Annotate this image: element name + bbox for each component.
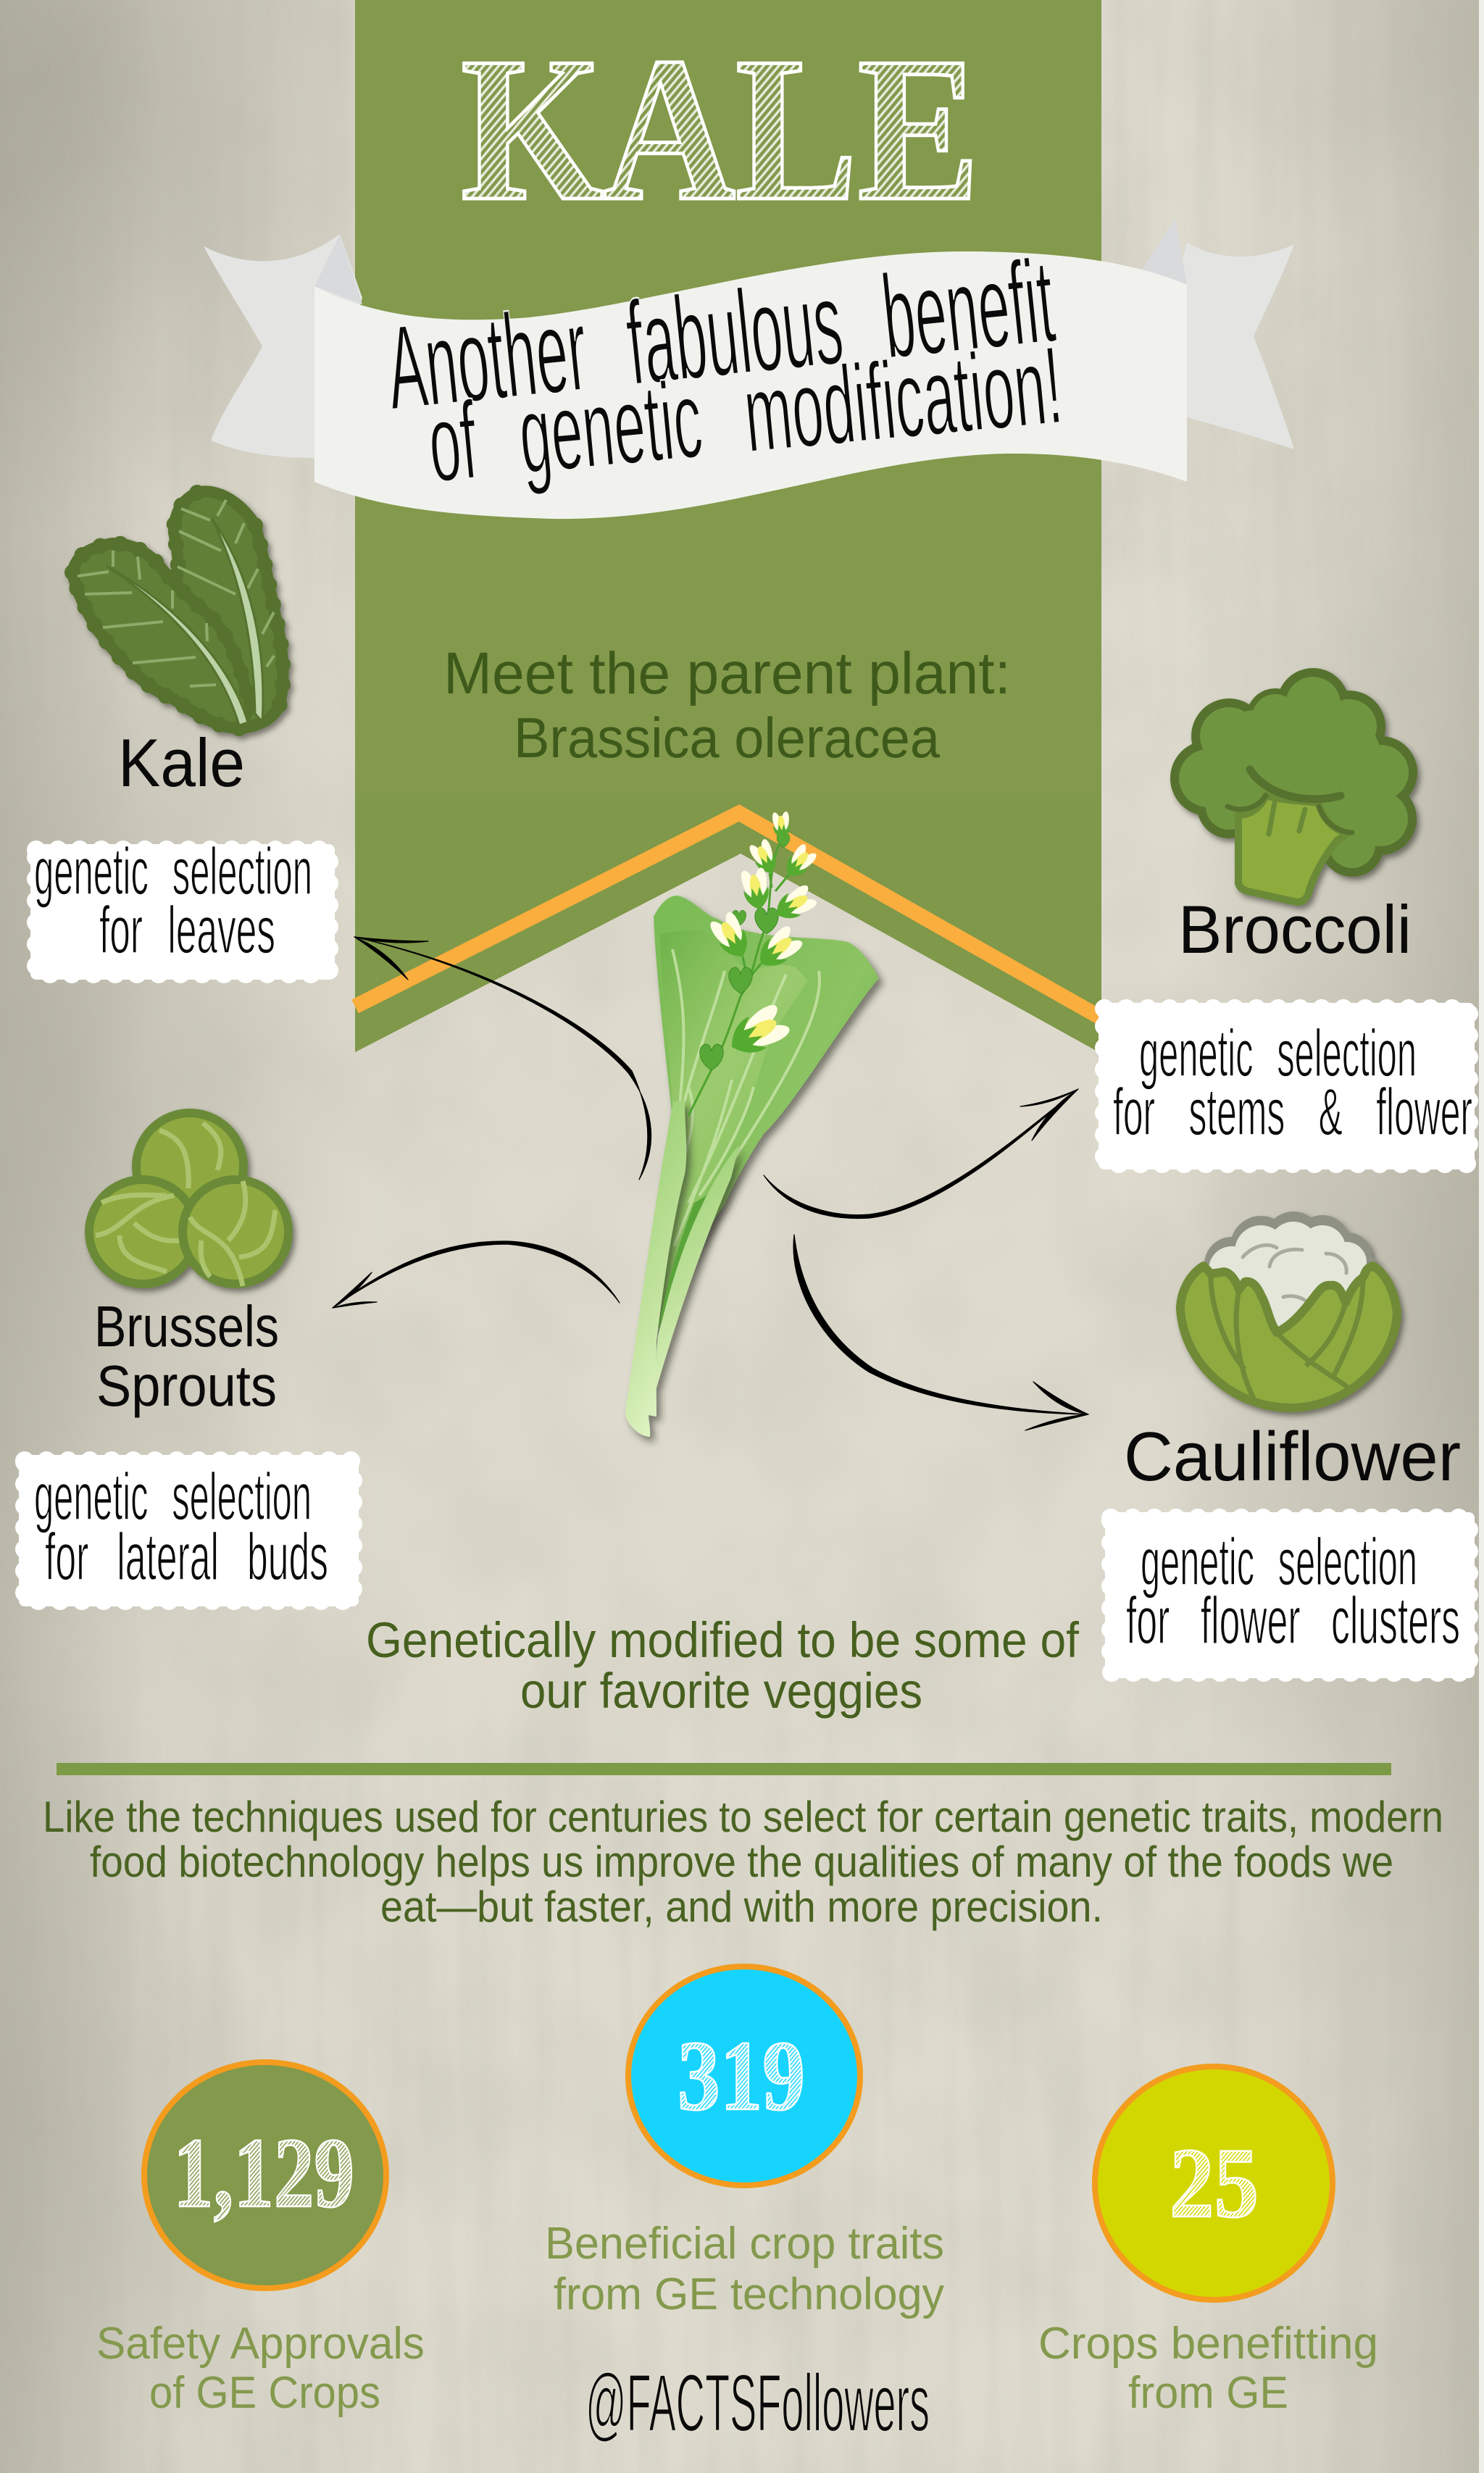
text: paragraph: eat—but faster, and with more precision. xyxy=(380,1882,1103,1931)
label: brussels sprouts xyxy=(94,1294,279,1418)
stat: 319 beneficial traits xyxy=(545,1967,944,2319)
text: @FACTSFollowers xyxy=(585,2358,930,2448)
text: genetically modified xyxy=(366,1612,1080,1719)
heading: meet the parent plant: Brassica oleracea xyxy=(514,706,941,770)
icon: kale leaves xyxy=(72,491,283,728)
green banner with chevron base xyxy=(355,0,1101,1054)
stat: 1,129 safety approvals: 1,129 xyxy=(173,2117,354,2228)
stat: 319 beneficial traits: from GE technology xyxy=(554,2269,944,2319)
icon: cauliflower xyxy=(1180,1212,1397,1408)
callout: kale selection: genetic selection xyxy=(34,835,312,909)
stat: 319 beneficial traits: 319 xyxy=(678,2020,805,2131)
plant flowers xyxy=(688,810,820,1116)
plant leaves xyxy=(654,896,879,1332)
callout: kale selection xyxy=(34,835,329,974)
text: paragraph xyxy=(43,1793,1443,1931)
arrow: to broccoli xyxy=(764,1089,1078,1218)
stat: 1,129 safety approvals xyxy=(96,2062,425,2418)
stat: 1,129 safety approvals: of GE Crops xyxy=(149,2368,380,2418)
parent plant illustration xyxy=(625,810,879,1437)
plant inner vein strips xyxy=(658,1196,706,1333)
ribbon right tail xyxy=(1142,218,1294,464)
stat: 1,129 safety approvals: Safety Approvals xyxy=(96,2319,425,2369)
heading: meet the parent plant xyxy=(443,641,1011,770)
callout: kale selection: for leaves xyxy=(99,893,275,967)
stat: 25 crops benefitting: from GE xyxy=(1128,2368,1288,2418)
ribbon left tail xyxy=(204,234,362,478)
label: brussels sprouts: Sprouts xyxy=(96,1354,277,1418)
callout: cauliflower selection xyxy=(1111,1518,1469,1672)
stat: 25 crops benefitting: Crops benefitting xyxy=(1038,2319,1378,2369)
text: genetically modified: our favorite veggies xyxy=(520,1663,922,1719)
stat: 25 crops benefitting xyxy=(1038,2067,1378,2418)
title: KALE xyxy=(461,14,980,243)
plant veins xyxy=(670,949,820,1246)
callout: brussels selection xyxy=(25,1460,353,1601)
label: cauliflower: Cauliflower xyxy=(1124,1418,1461,1496)
text: genetically modified: Genetically modified to be some of xyxy=(366,1612,1080,1668)
callout: broccoli selection xyxy=(1104,1009,1472,1164)
arrow: to cauliflower xyxy=(793,1235,1088,1430)
stat: 319 beneficial traits: Beneficial crop traits xyxy=(545,2219,944,2269)
label: kale: Kale xyxy=(118,725,245,801)
orange chevron stripe xyxy=(355,813,1101,1018)
plant front leaf xyxy=(660,930,808,1301)
callout: brussels selection: for lateral buds xyxy=(45,1520,328,1594)
heading: meet the parent plant: Meet the parent plant: xyxy=(443,641,1011,706)
label: broccoli: Broccoli xyxy=(1178,891,1412,967)
plant stalks xyxy=(625,1101,739,1437)
callout: brussels selection: genetic selection xyxy=(34,1460,312,1534)
icon: brussels sprouts xyxy=(89,1113,288,1286)
ribbon front xyxy=(314,251,1187,519)
text: paragraph: food biotechnology helps us improve the qualities of many of the foods we xyxy=(90,1838,1393,1886)
icon: broccoli xyxy=(1170,668,1417,902)
label: brussels sprouts: Brussels xyxy=(94,1294,279,1359)
stat: 25 crops benefitting: 25 xyxy=(1170,2127,1259,2238)
arrow: to kale xyxy=(354,937,651,1180)
ribbon banner xyxy=(204,218,1294,519)
broccoli stem xyxy=(1238,796,1348,902)
arrow: to brussels sprouts xyxy=(333,1241,620,1308)
